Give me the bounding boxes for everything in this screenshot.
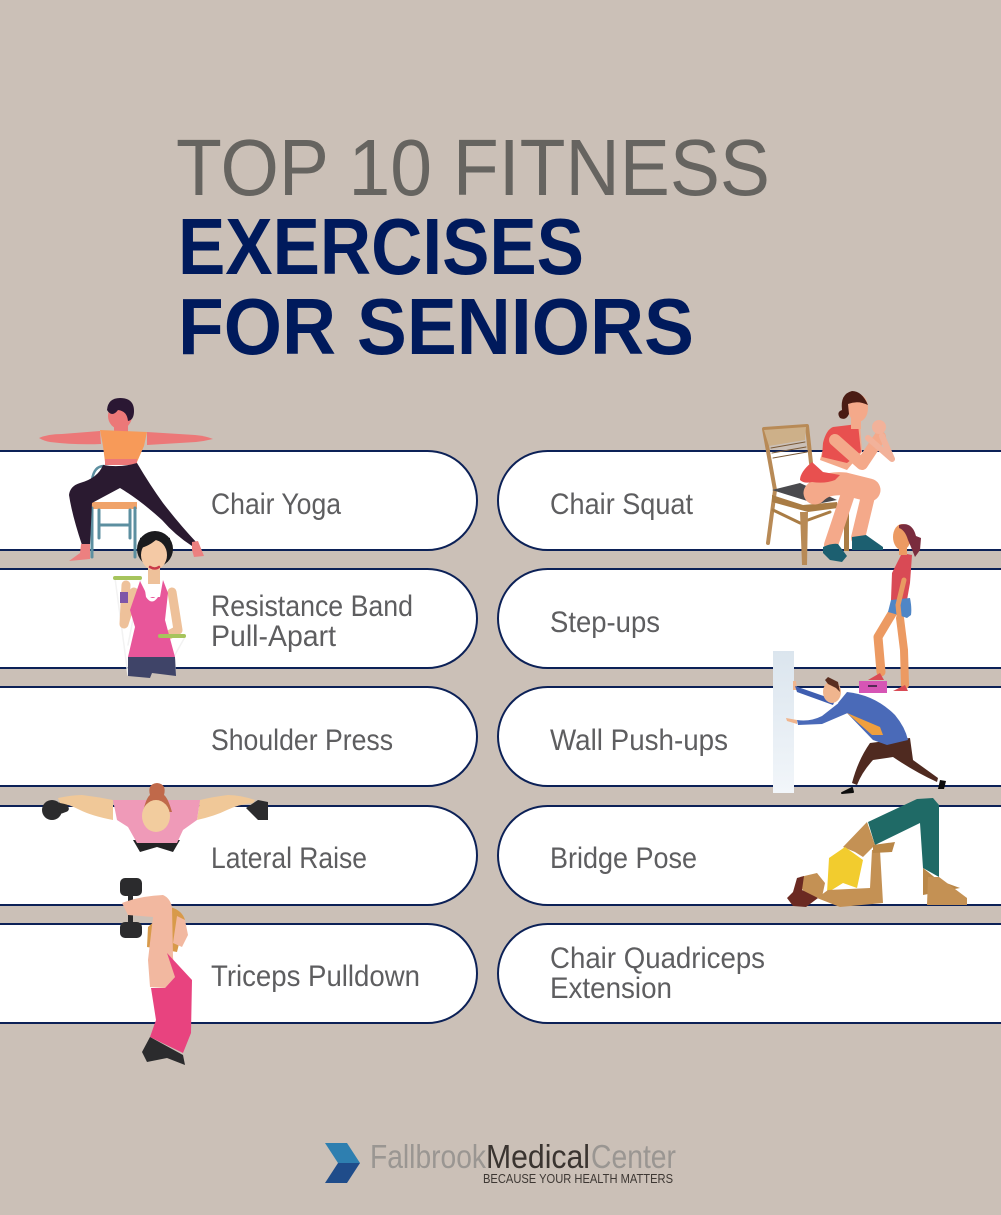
label: bridge pose: Bridge Pose [550, 842, 697, 875]
panel: step-ups [498, 569, 1001, 668]
title: EXERCISES [178, 202, 584, 291]
icon: woman doing chair squat [764, 391, 892, 565]
panel: bridge pose [498, 806, 1001, 905]
icon: woman doing chair yoga [39, 398, 213, 561]
label: chair quadriceps extension [550, 942, 765, 1005]
label: chair yoga: Chair Yoga [211, 488, 341, 521]
label: lateral raise: Lateral Raise [211, 842, 367, 875]
label: chair squat: Chair Squat [550, 488, 694, 521]
label: wall push-ups: Wall Push-ups [550, 724, 728, 757]
title [176, 123, 770, 371]
icon: woman doing triceps pulldown [120, 878, 192, 1065]
panel: chair yoga [0, 451, 477, 550]
label: chair quadriceps extension: Chair Quadriceps [550, 942, 765, 975]
label: triceps pulldown: Triceps Pulldown [211, 960, 420, 993]
icon: woman doing bridge pose [787, 798, 967, 907]
label: chair quadriceps extension: Extension [550, 972, 672, 1005]
title: FOR SENIORS [178, 282, 694, 371]
icon: woman with resistance bands [115, 531, 185, 678]
logo: Fallbrook Medical Center: Fallbrook [370, 1138, 486, 1175]
panel: lateral raise [0, 806, 477, 905]
panel: shoulder press [0, 687, 477, 786]
panel: triceps pulldown [0, 924, 477, 1023]
panel: chair quadriceps extension [498, 924, 1001, 1023]
icon: man doing wall push-ups [773, 651, 946, 793]
label: resistance band pull-apart [211, 590, 413, 653]
logo: Fallbrook Medical Center: Medical [486, 1138, 590, 1175]
label: resistance band pull-apart: Pull-Apart [211, 620, 337, 653]
logo: Fallbrook Medical Center [325, 1138, 676, 1186]
label: step-ups: Step-ups [550, 606, 660, 639]
panel: resistance band pull-apart [0, 569, 477, 668]
panel: chair squat [498, 451, 1001, 550]
title: TOP 10 FITNESS [176, 123, 770, 212]
label: resistance band pull-apart: Resistance Band [211, 590, 413, 623]
panel: wall push-ups [498, 687, 1001, 786]
logo: Fallbrook Medical Center: BECAUSE YOUR HEALTH MATTERS [483, 1172, 673, 1186]
label: shoulder press: Shoulder Press [211, 724, 393, 757]
icon: woman doing lateral raise [42, 783, 268, 852]
icon: logo chevron [325, 1143, 360, 1183]
icon: woman doing step-ups [859, 524, 921, 693]
logo: Fallbrook Medical Center: Center [591, 1138, 676, 1175]
